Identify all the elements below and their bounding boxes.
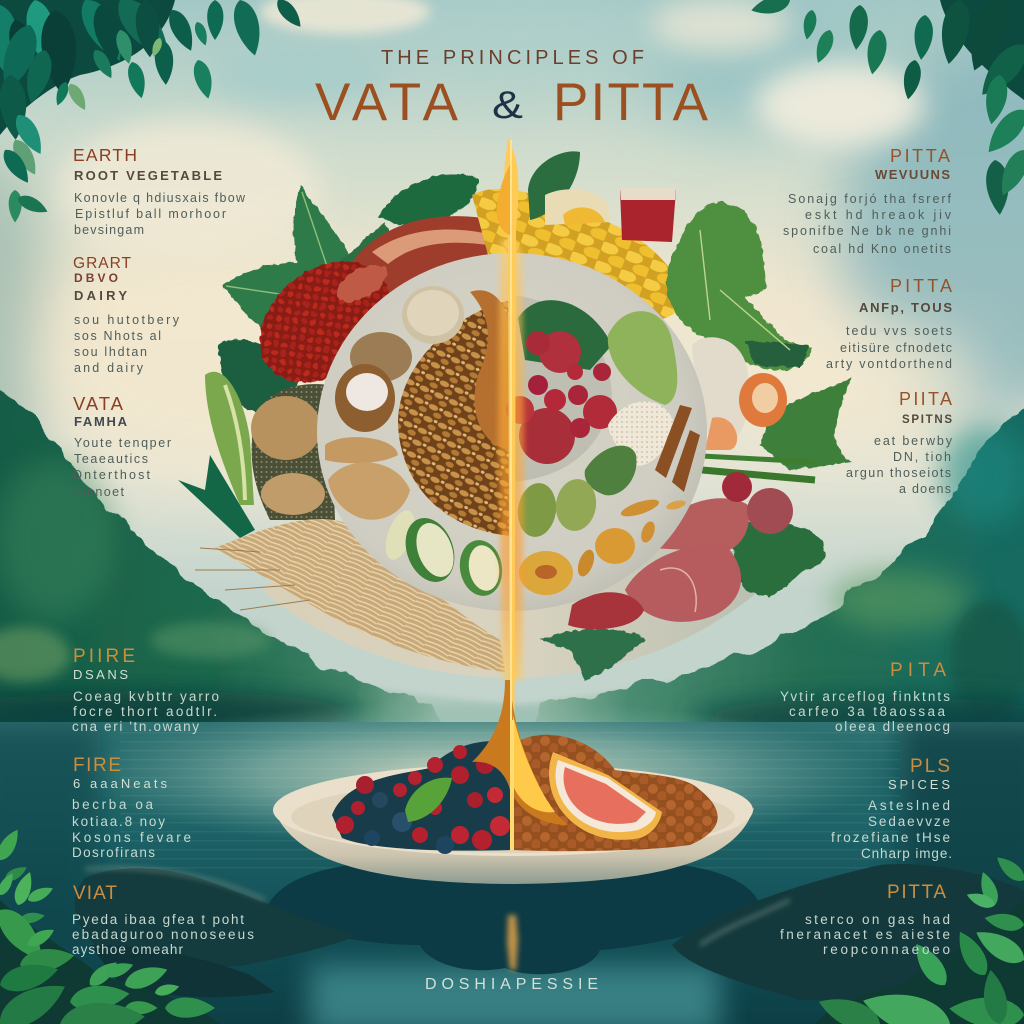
lower left text: fire: FIRE [73,755,121,776]
radish [722,472,793,534]
green leaf [405,778,452,822]
lower right text: spices: Sedaevvze [868,814,950,829]
right text: pitta 3: argun thoseiots [846,466,951,480]
lower right text: spices [831,756,952,861]
left text: earth root vegetable: Konovle q hdiusxais fbow [74,191,246,205]
title [315,47,709,132]
lower left text: fire: kotiaa.8 noy [72,814,165,829]
lower right text: pita: Yvtir arceflog finktnts [780,689,950,704]
dish body [273,808,754,884]
corn heap [472,189,686,321]
green beans [702,456,815,480]
cabbage leaf [608,311,677,405]
lower right text: pitta: PITTA [887,882,946,903]
corner foliage: top left [0,0,306,222]
red chilli mass [236,237,414,407]
footer label: DOSHIAPESSIE [425,976,598,993]
lower left text: piire: Coeag kvbttr yarro [73,689,219,704]
brown gourd [470,290,510,450]
right text: pitta 1: sponifbe Ne bk ne gnhi [783,224,951,238]
cucumber slices [380,506,507,599]
title: VATA [315,73,459,132]
lower flame [472,680,568,825]
lower right text: pitta: fneranacet es aieste [780,927,950,942]
rocks: right [672,864,1024,1000]
right text: pitta 1: Sonajg forjó tha fsrerf [788,192,952,206]
right text: pitta 1: PITTA [890,146,950,166]
right herbs [540,520,825,680]
lower left text: fire: Kosons fevare [72,830,191,845]
background: lake water [0,700,1024,1024]
white radish root [692,337,749,450]
right text: pitta 3: DN, tioh [893,450,951,464]
left text: grart dairy: DAIRY [74,288,127,303]
left text: grart dairy [73,255,180,375]
rocks: left [75,868,357,997]
lower left text: viat: Pyeda ibaa gfea t poht [72,912,244,927]
root slices [251,384,335,520]
left text: vata: Teaeautics [74,452,148,466]
right text: pitta 1: eskt hd hreaok jiv [805,208,952,222]
left text: grart dairy: DBVO [74,271,118,285]
left text: earth root vegetable [73,145,246,237]
glass of red juice [620,188,676,242]
right text: pitta 2: eitisüre cfnodetc [840,341,952,355]
corner foliage: bottom left [0,826,220,1024]
dish shadow reflection [268,859,760,974]
jar of yellow food [545,189,610,225]
left text: vata: VATA [73,393,124,414]
grain bowl [402,286,464,344]
title: THE PRINCIPLES OF [381,47,644,69]
large right leaves [667,201,852,470]
left text: vata [73,393,171,499]
lower right text: pita: carfeo 3a t8aossaa [789,704,945,719]
grapefruit wedge [549,752,662,840]
lower left text: piire: cna eri 'tn.owany [72,719,199,734]
left text: vata: Sionoet [73,485,125,499]
right text: pitta 2: ANFp, TOUS [859,300,952,315]
lower left text: fire: becrba oa [72,797,153,812]
lower left text: fire: 6 aaaNeats [73,776,168,791]
left text: grart dairy: and dairy [74,361,144,375]
golden lentil spots [519,496,687,595]
left text: vata: Youte tenqper [74,436,171,450]
lower left text: viat: aysthoe omeahr [72,942,184,957]
lower right text: pitta: sterco on gas had [805,912,950,927]
lower left text: viat [72,883,254,957]
white grains [608,401,675,466]
ginger pieces [325,437,410,520]
left text: grart dairy: sou hutotbery [74,313,180,327]
lower left text: viat: ebadaguroo nonoseeus [72,927,254,942]
right text: pitta 1: WEVUUNS [875,167,950,182]
left text: earth root vegetable: bevsingam [74,223,144,237]
lower right text: pitta: reopconnaeoeo [823,942,950,957]
dark leaf behind jar [528,151,580,220]
right text: pitta 3: a doens [899,482,951,496]
right food: bowl [512,295,612,482]
lower right text: spices: Cnharp imge. [861,846,952,861]
right text: pitta 3 [846,389,953,496]
berry heap [332,741,512,854]
raw meat cuts [568,498,749,629]
herbs behind tomatoes [518,300,612,370]
left text: grart dairy: sou lhdtan [74,345,147,359]
title: PITTA [553,73,709,132]
right text: pitta 2: tedu vvs soets [846,324,952,338]
lower right text: spices: PLS [910,756,950,777]
wheat bundle [195,519,505,672]
left text: grart dairy: GRART [73,255,132,272]
celery stalks [205,372,254,505]
spice heap [512,735,718,851]
lower right text: spices: SPICES [888,777,950,792]
flame reflection [507,915,518,970]
lower left text: fire [72,755,191,860]
green balls [514,446,637,539]
lower right text: pita [780,660,950,734]
left food: nut and grain bowl [398,300,512,536]
back foliage: left herbs [218,174,478,425]
lower left text: viat: VIAT [73,883,117,904]
lower dish with berries and spices [273,680,754,884]
right text: pitta 2: arty vontdorthend [826,357,952,371]
left text: earth root vegetable: EARTH [73,145,137,165]
leaf veins [226,192,335,300]
background: right forest hills [525,398,1024,738]
lower left text: fire: Dosrofirans [72,845,155,860]
corner foliage: bottom right [814,852,1024,1024]
left text: vata: FAMHA [74,414,128,429]
right text: pitta 1: coal hd Kno onetits [813,242,951,256]
walnuts and coconut [335,332,412,432]
red meat slices [352,216,505,300]
left text: earth root vegetable: ROOT VEGETABLE [74,168,222,183]
lower left text: piire: PIIRE [73,646,135,667]
lower right text: pitta [780,882,950,957]
lower left text: piire: DSANS [73,667,128,682]
title: & [492,84,523,127]
right text: pitta 2 [826,276,952,371]
orange papaya [705,373,787,450]
lower right text: pita: oleea dleenocg [835,719,950,734]
right text: pitta 2: PITTA [890,276,952,296]
left text: earth root vegetable: Epistluf ball morhoor [75,207,226,221]
lower right text: pita: PITA [890,660,946,681]
left text: vata: Dnterthost [73,468,151,482]
main plate disc [317,253,707,611]
dark green strips [178,455,255,538]
plate underside [262,540,785,678]
background: distant hazy hills [330,670,720,725]
leaf vein highlights [700,230,790,350]
right text: pitta 1 [783,146,952,256]
lower left text: piire: focre thort aodtlr. [73,704,217,719]
lower left text: piire [72,646,219,734]
tomatoes and berries [506,331,617,464]
right text: pitta 3: PIITA [899,389,952,409]
background: left forest hills [0,385,450,739]
right text: pitta 3: SPITNS [902,414,952,426]
lower right text: spices: Asteslned [868,798,950,813]
right text: pitta 3: eat berwby [874,434,953,448]
left text: grart dairy: sos Nhots al [74,329,161,343]
cinnamon sticks [655,405,700,492]
background: sky [0,0,1024,760]
lower right text: spices: frozefiane tHse [831,830,950,845]
central flame line [497,138,524,850]
corner foliage: top right [749,0,1024,216]
central food plate illustration [178,138,852,850]
